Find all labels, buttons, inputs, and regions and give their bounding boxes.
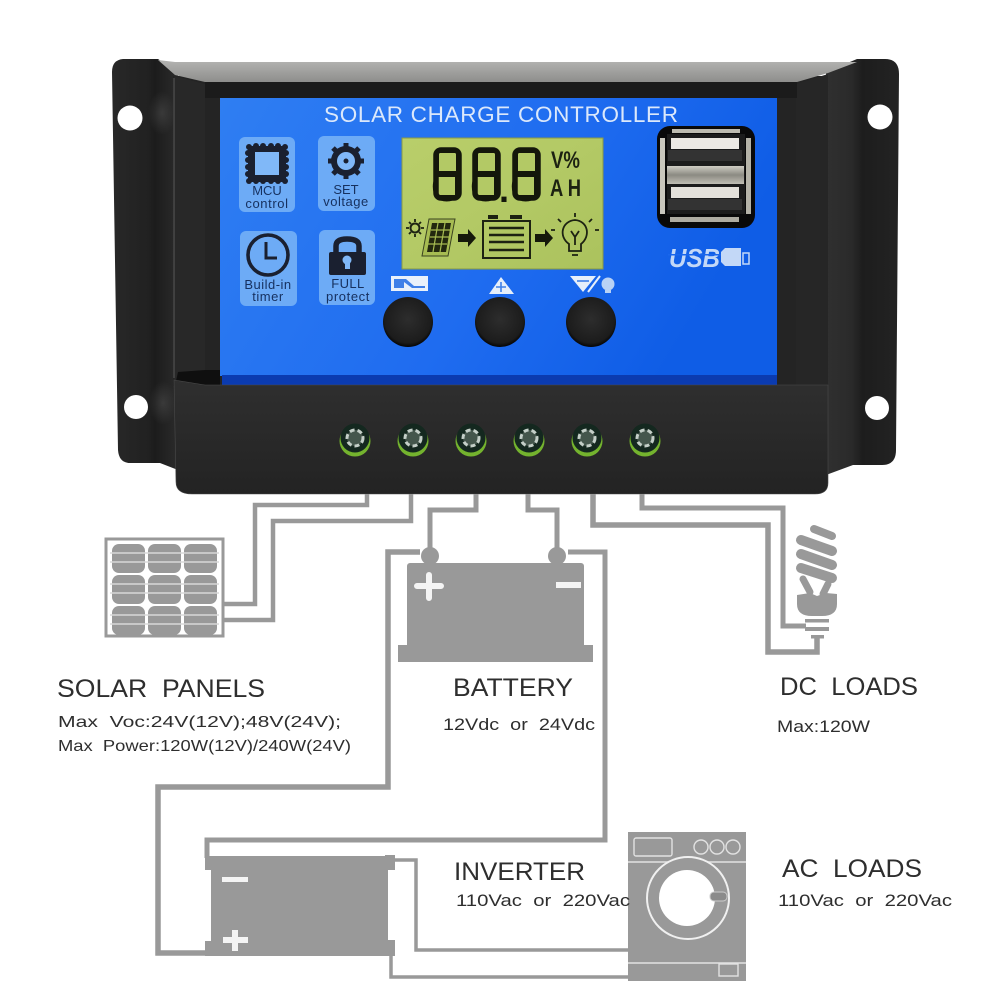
LCD readout digits — [431, 135, 541, 217]
washer control strip — [628, 838, 746, 976]
left lower mounting hole — [124, 395, 148, 419]
right mounting bracket — [826, 59, 899, 475]
wire: solar panel positive — [222, 494, 367, 604]
screw terminal 5 — [572, 424, 602, 456]
label: SET voltage: SET — [333, 182, 359, 197]
wire: solar panel negative — [222, 494, 411, 620]
icon: battery — [398, 547, 593, 662]
LCD icon: bulb — [551, 213, 599, 255]
icon: gear — [328, 143, 364, 179]
wire: battery to inverter right — [207, 552, 605, 858]
USB double port — [657, 126, 755, 228]
battery minus sign — [556, 582, 581, 588]
icon: DC load bulb — [797, 529, 837, 638]
wire: battery positive — [430, 494, 476, 550]
screw terminal 1 — [340, 424, 370, 456]
feature tile: Build-in timer — [240, 231, 297, 306]
feature tile: MCU control — [239, 137, 295, 212]
inverter minus sign — [222, 877, 248, 882]
icon: padlock — [329, 239, 366, 275]
label: FULL protect: protect — [326, 289, 370, 304]
mode button — [383, 297, 433, 347]
text: battery: BATTERY — [453, 674, 573, 702]
bracket highlight upper — [148, 91, 176, 135]
battery specs: 12Vdc or 24Vdc — [443, 715, 596, 734]
LCD readout digits: 8 — [470, 135, 501, 217]
inverter specs: 110Vac or 220Vac — [456, 891, 631, 910]
label: MCU control: control — [245, 196, 289, 211]
icon: plus button symbol — [489, 277, 514, 294]
battery plus sign — [417, 575, 441, 598]
dark recess above terminal block — [176, 370, 220, 385]
left edge highlight — [173, 78, 175, 378]
wiring diagram lines — [158, 494, 817, 977]
icon: mode button symbol — [391, 276, 428, 291]
bracket highlight lower — [149, 381, 177, 425]
plus button — [475, 297, 525, 347]
blue panel — [220, 98, 777, 376]
AC load specs: 110Vac or 220Vac — [778, 891, 953, 910]
text: battery — [443, 674, 596, 734]
icon: AC load washing machine — [628, 832, 746, 981]
LCD arrow to battery — [458, 229, 476, 247]
wire: DC load positive — [593, 494, 817, 652]
label: MCU control: MCU — [252, 183, 282, 198]
LCD digit segment frames — [436, 150, 538, 198]
LCD readout digits: 8 — [431, 135, 462, 217]
panel heading: SOLAR CHARGE CONTROLLER — [324, 102, 678, 127]
icon: clock — [248, 235, 288, 275]
left upper mounting hole — [118, 106, 142, 130]
solar panels specs: Max Voc:24V(12V);48V(24V); — [58, 714, 341, 731]
blue panel lower edge — [222, 375, 777, 385]
inverter plus sign — [223, 930, 248, 951]
right upper mounting hole — [868, 104, 892, 130]
USB logo — [668, 243, 749, 273]
front bevel right — [796, 74, 828, 386]
minus button — [566, 297, 616, 347]
dark strip above panel — [205, 82, 797, 98]
LCD readout digits: 8 — [510, 135, 541, 217]
icon: inverter — [205, 855, 395, 956]
washer door handle — [710, 892, 727, 901]
front face of case — [173, 76, 828, 386]
icon: microchip — [245, 143, 289, 184]
LCD display — [402, 135, 603, 269]
wire: inverter to AC load lower — [391, 956, 628, 977]
text: AC loads — [778, 855, 953, 910]
solar panels specs: Max Power:120W(12V)/240W(24V) — [58, 738, 351, 755]
washer drum — [647, 857, 729, 939]
icon: solar panel — [106, 539, 223, 636]
left mounting bracket — [112, 59, 178, 470]
screw terminal 6 — [630, 424, 660, 456]
label: SET voltage: voltage — [323, 194, 369, 209]
wire: DC load negative — [642, 494, 806, 626]
top face of case — [158, 60, 857, 82]
solar panel cells — [112, 544, 217, 635]
front bevel left — [174, 76, 205, 386]
text: DC loads — [777, 673, 918, 736]
wire: battery negative — [528, 494, 557, 550]
USB logo: USB — [669, 243, 720, 273]
icon: minus and light button symbol — [570, 276, 614, 293]
wire: inverter to AC load upper — [394, 860, 628, 950]
label: FULL protect: FULL — [331, 276, 365, 291]
LCD unit AH: A H — [550, 175, 581, 202]
LCD unit V percent: V% — [551, 147, 580, 174]
label: Build-in timer: timer — [252, 289, 284, 304]
text: solar panels — [57, 675, 351, 755]
wire: battery to inverter left — [158, 552, 420, 953]
screw terminal 2 — [398, 424, 428, 456]
washer door window — [659, 870, 715, 926]
right lower mounting hole — [865, 396, 889, 420]
feature tile: SET voltage — [318, 136, 375, 211]
LCD icon: solar panel — [422, 219, 455, 256]
LCD decimal point: . — [499, 169, 509, 210]
text: inverter — [454, 858, 631, 910]
controller device — [112, 59, 899, 494]
feature tile: FULL protect — [319, 230, 375, 305]
terminal block — [174, 380, 828, 494]
text: solar panels: SOLAR PANELS — [57, 675, 265, 703]
text: AC loads: AC LOADS — [782, 855, 922, 883]
screw terminal 4 — [514, 424, 544, 456]
text: inverter: INVERTER — [454, 858, 585, 886]
LCD icon: battery — [483, 217, 530, 258]
label: Build-in timer: Build-in — [244, 277, 292, 292]
LCD icon: sun — [406, 219, 424, 237]
LCD arrow to bulb — [535, 229, 553, 247]
text: DC loads: DC LOADS — [780, 673, 918, 701]
screw terminal 3 — [456, 424, 486, 456]
DC load specs: Max:120W — [777, 717, 870, 736]
